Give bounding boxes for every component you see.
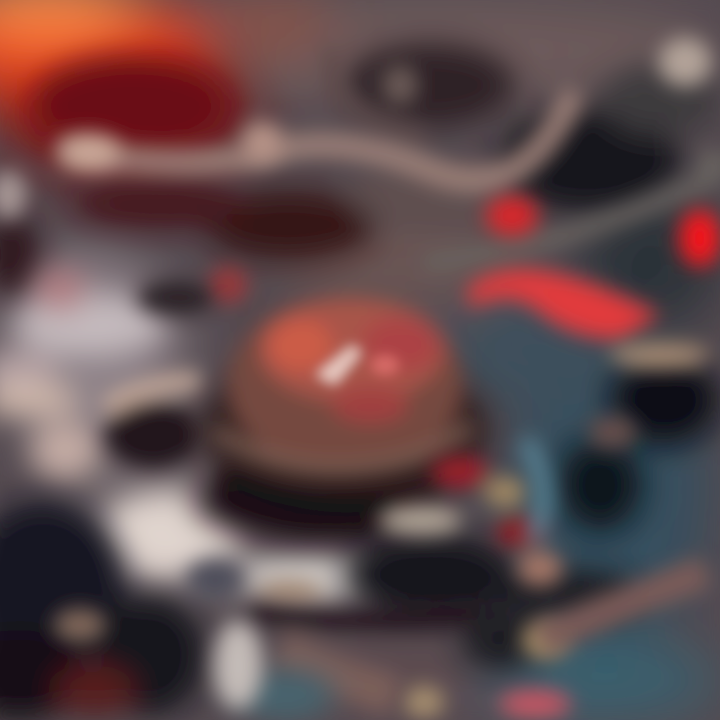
- bright red spots: [208, 196, 720, 340]
- right side dark pieces: [345, 355, 720, 670]
- pale spots lower left: [54, 558, 262, 709]
- central dome: [195, 297, 490, 542]
- dome highlight: [315, 345, 399, 385]
- dome base shadow: [195, 358, 490, 542]
- lower left dark shapes: [0, 500, 335, 720]
- dark small bowl: [104, 280, 213, 469]
- left pale clouds: [0, 268, 388, 602]
- bright chips: [258, 342, 710, 718]
- dark shapes top: [0, 43, 720, 297]
- diagonal bands lower right: [250, 440, 706, 696]
- dome body: [215, 297, 470, 509]
- curved light streaks: [70, 50, 720, 262]
- highlights top: [0, 38, 711, 219]
- red glow top-left: [0, 0, 335, 175]
